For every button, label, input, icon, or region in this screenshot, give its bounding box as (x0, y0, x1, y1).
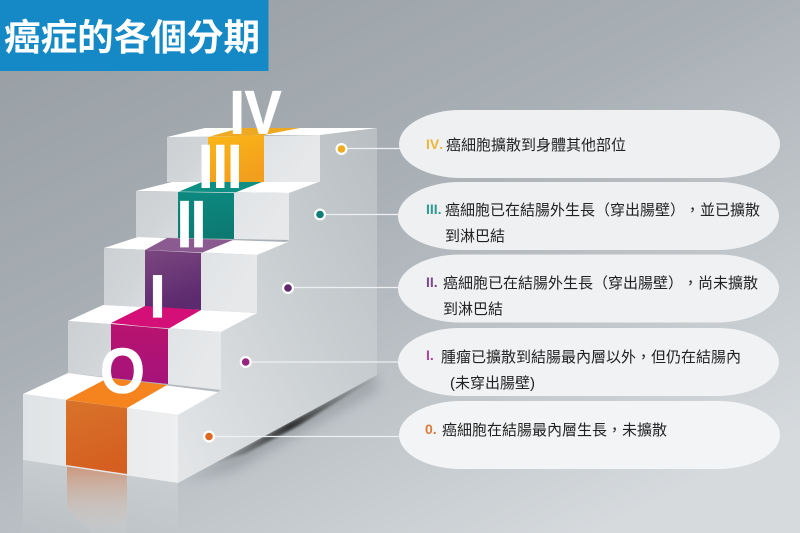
staircase (23, 128, 377, 533)
numeral O: O (100, 335, 145, 407)
panel: stage IV (399, 110, 780, 178)
step III (136, 182, 319, 240)
panel: stage II (398, 254, 779, 322)
numeral IV: IV (230, 78, 282, 146)
panel: stage III: III. (426, 201, 442, 217)
side wall (178, 128, 377, 483)
numeral I: I (149, 262, 166, 330)
connector II (282, 282, 400, 294)
panel: stage IV: 癌細胞擴散到身體其他部位 (446, 136, 626, 154)
step IV (167, 128, 377, 182)
panel: stage II: II. (426, 274, 438, 290)
panel: stage II: 癌細胞已在結腸外生長（穿出腸壁），尚未擴散 (443, 274, 758, 292)
cast shadow (185, 375, 377, 480)
step I (68, 305, 257, 390)
panel: stage I: I. (426, 347, 434, 363)
title: 癌症的各個分期 (4, 17, 260, 58)
panel: stage I: (未穿出腸壁) (450, 375, 535, 392)
panel: stage III: 癌細胞已在結腸外生長（穿出腸壁），並已擴散 (445, 201, 760, 219)
step 0 (23, 373, 218, 483)
connector IV (336, 143, 400, 155)
panel: stage I: 腫瘤已擴散到結腸最內層以外，但仍在結腸內 (441, 348, 741, 366)
numeral III: III (198, 132, 242, 200)
panel: stage IV: IV. (426, 136, 443, 152)
numeral II: II (178, 188, 206, 260)
step II (104, 237, 288, 313)
panel: stage 0: 0. (425, 421, 437, 437)
panel: stage I (398, 328, 779, 396)
title (0, 0, 268, 71)
panel: stage 0 (399, 401, 780, 469)
connector III (314, 208, 400, 220)
panel: stage III (398, 182, 779, 250)
connector 0 (203, 430, 400, 442)
floor reflection (23, 460, 178, 533)
connector I (240, 356, 400, 368)
panel: stage II: 到淋巴結 (443, 301, 503, 318)
panel: stage III: 到淋巴結 (445, 228, 505, 245)
panel: stage 0: 癌細胞在結腸最內層生長，未擴散 (442, 421, 667, 439)
